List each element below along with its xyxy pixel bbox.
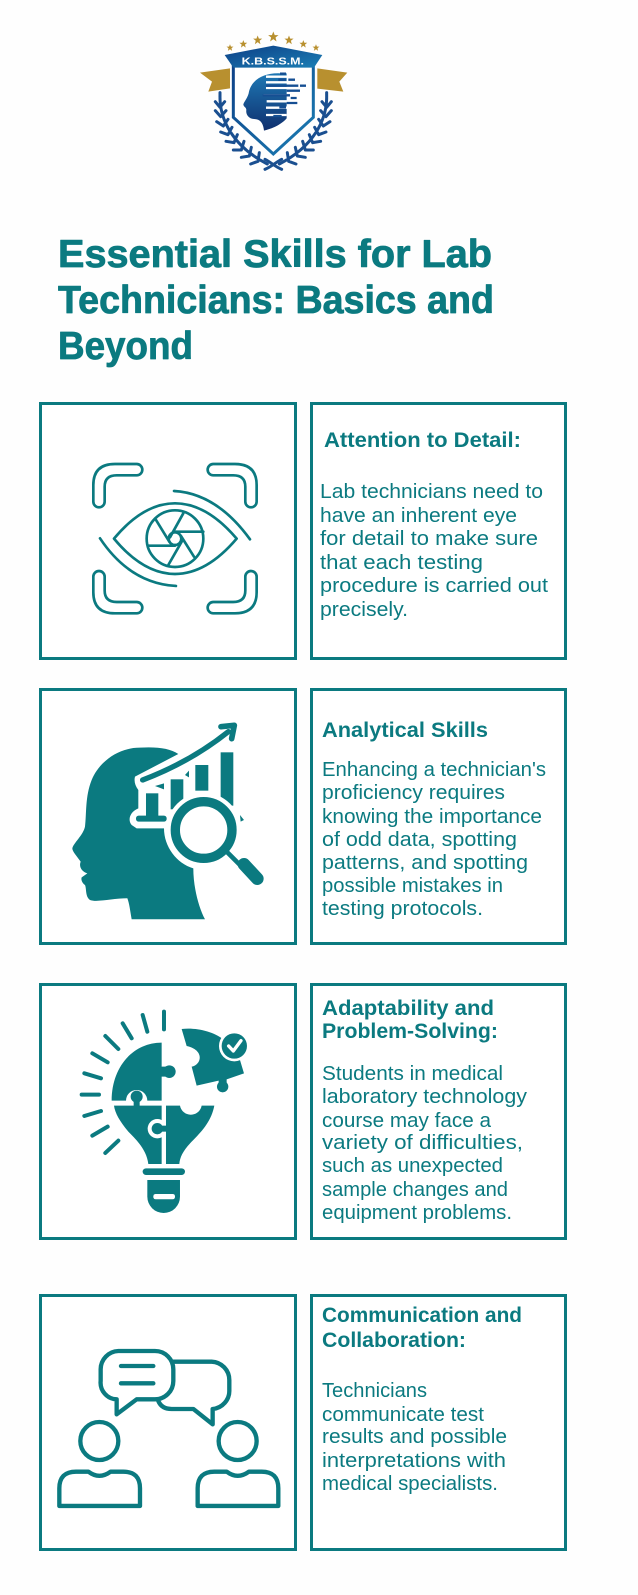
heading: communication: Communication and (322, 1304, 522, 1327)
text: communication body: results and possible (322, 1426, 507, 1448)
text: attention body: procedure is carried out (320, 575, 548, 597)
title: Essential Skills for Lab (58, 233, 492, 276)
panel: attention icon (40, 404, 296, 658)
logo: K.B.S.S.M. shield (200, 31, 347, 169)
icon: head with chart and magnifier (72, 725, 257, 919)
panel: adaptability text (312, 984, 566, 1238)
logo stars (227, 31, 319, 51)
title (58, 233, 494, 368)
logo ribbons (200, 68, 347, 92)
heading: communication (322, 1304, 522, 1352)
text: attention body (320, 481, 548, 621)
text: attention body: that each testing (320, 552, 483, 574)
logo data lines (263, 77, 300, 115)
text: communication body: medical specialists. (322, 1473, 498, 1495)
text: adaptability body: Students in medical (322, 1063, 503, 1085)
text: attention body: Lab technicians need to (320, 481, 543, 503)
text: adaptability body (322, 1063, 527, 1224)
text: adaptability body: variety of difficulties, (322, 1132, 523, 1154)
text: attention body: for detail to make sure (320, 528, 538, 550)
text: analytical body: testing protocols. (322, 898, 483, 920)
heading: communication: Collaboration: (322, 1329, 466, 1352)
text: adaptability body: laboratory technology (322, 1086, 527, 1108)
logo banner text: K.B.S.S.M. (242, 56, 304, 67)
title: Beyond (58, 325, 193, 368)
heading: adaptability (322, 997, 498, 1043)
icon: eye with shutter (93, 464, 257, 613)
text: attention body: have an inherent eye (320, 505, 517, 527)
heading: adaptability: Adaptability and (322, 997, 494, 1020)
text: analytical body: Enhancing a technician's (322, 759, 546, 781)
text: attention body: precisely. (320, 599, 408, 621)
icon: two people with speech bubbles (59, 1351, 278, 1506)
logo banner (225, 46, 322, 68)
text: communication body: Technicians (322, 1380, 427, 1402)
panel: attention text (312, 404, 566, 658)
logo head (243, 73, 287, 131)
title: Technicians: Basics and (58, 279, 494, 322)
text: analytical body (322, 759, 546, 920)
text: analytical body: patterns, and spotting (322, 852, 528, 874)
panel: communication text (312, 1296, 566, 1550)
text: communication body (322, 1380, 507, 1495)
text: communication body: interpretations with (322, 1450, 506, 1472)
heading: analytical skills: Analytical Skills (322, 719, 488, 742)
logo shield (233, 60, 313, 154)
text: communication body: communicate test (322, 1404, 484, 1426)
logo laurels (215, 93, 331, 169)
text: analytical body: possible mistakes in (322, 875, 503, 897)
text: adaptability body: equipment problems. (322, 1202, 512, 1224)
icon: puzzle light bulb (82, 1012, 250, 1213)
panel: communication icon (40, 1296, 296, 1550)
panel: analytical icon (40, 690, 296, 944)
text: adaptability body: sample changes and (322, 1179, 508, 1201)
heading: adaptability: Problem-Solving: (322, 1020, 498, 1043)
text: adaptability body: such as unexpected (322, 1155, 503, 1177)
text: analytical body: knowing the importance (322, 806, 542, 828)
panel: adaptability icon (40, 984, 296, 1238)
text: analytical body: of odd data, spotting (322, 829, 517, 851)
text: analytical body: proficiency requires (322, 782, 505, 804)
heading: attention to detail: Attention to Detail: (324, 429, 521, 452)
text: adaptability body: course may face a (322, 1110, 492, 1132)
panel: analytical text (312, 690, 566, 944)
